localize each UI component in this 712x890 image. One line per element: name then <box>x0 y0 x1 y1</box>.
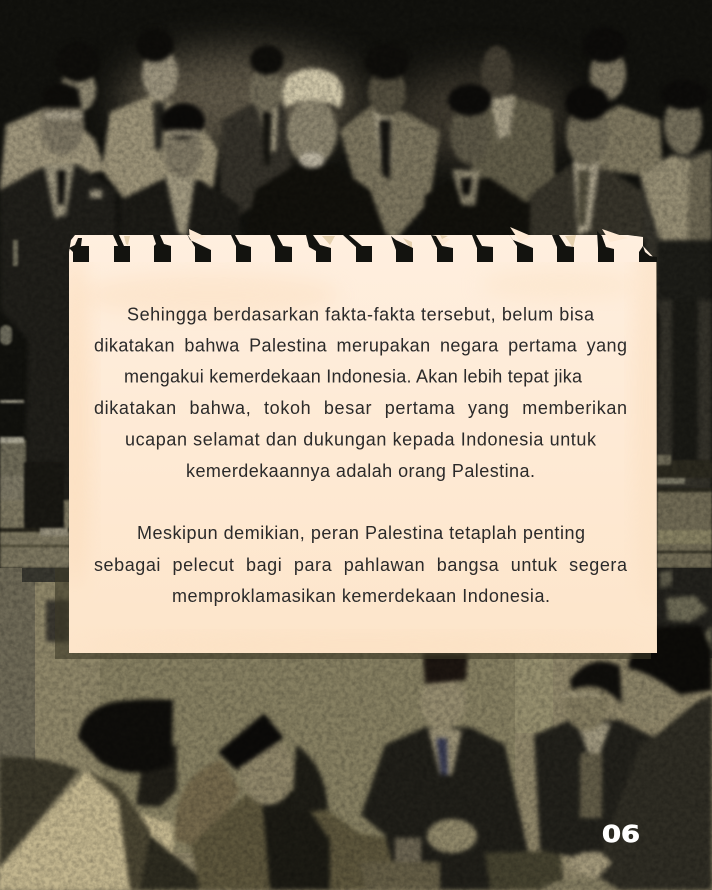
paper sheet <box>69 235 657 653</box>
man at right with fez <box>540 625 712 890</box>
left chair <box>0 757 80 867</box>
man seen from behind with dark cap <box>0 699 215 890</box>
back row figure 1 <box>0 76 106 192</box>
front figure five <box>528 84 646 241</box>
front figure two <box>120 103 240 240</box>
dark figure at upper right edge <box>657 568 712 660</box>
text block: conclusion paragraphs <box>94 304 628 606</box>
stairs on right <box>657 455 712 568</box>
back row figure 3 <box>220 45 292 215</box>
top photo: group portrait <box>0 0 712 568</box>
tab shading <box>124 235 576 250</box>
front figure left, full body <box>0 82 118 520</box>
paragraph two: sebagai pelecut bagi para pahlawan bangsa untuk segera <box>94 555 628 575</box>
page number: 06 <box>602 820 640 848</box>
man in dark suit with fez <box>360 653 565 890</box>
front figure four <box>422 82 527 226</box>
paragraph one: dikatakan bahwa Palestina merupakan negara pertama yang <box>94 336 627 356</box>
back far right figure <box>587 56 664 178</box>
chair behind old man <box>175 760 240 850</box>
back right figure 2 <box>470 46 555 225</box>
paragraph two: memproklamasikan kemerdekaan Indonesia. <box>172 586 550 606</box>
paragraph one: ucapan selamat dan dukungan kepada Indonesia untuk <box>125 430 597 450</box>
paragraph one: mengakui kemerdekaan Indonesia. Akan lebih tepat jika <box>124 366 583 386</box>
stairs on left <box>0 240 70 568</box>
panel shadow <box>55 568 651 659</box>
torn paper note panel <box>69 227 657 653</box>
paragraph one: kemerdekaannya adalah orang Palestina. <box>186 461 535 481</box>
binder holes <box>69 231 657 262</box>
paragraph two: Meskipun demikian, peran Palestina tetaplah penting <box>137 523 585 543</box>
man with glasses <box>534 661 659 860</box>
paragraph one: Sehingga berdasarkan fakta-fakta tersebut, belum bisa <box>127 304 595 324</box>
bottom photo: meeting in a room <box>0 568 712 890</box>
paragraph two <box>94 523 628 606</box>
center figure with white turban <box>245 68 388 240</box>
back right figure with light coat <box>338 66 442 235</box>
far right figure <box>640 80 712 490</box>
paragraph one <box>94 304 627 481</box>
raised paper tabs <box>189 227 628 246</box>
old man seated with black cap <box>190 711 394 890</box>
paragraph one: dikatakan bahwa, tokoh besar pertama yang memberikan <box>94 398 627 418</box>
back row figure 2 <box>100 32 220 200</box>
